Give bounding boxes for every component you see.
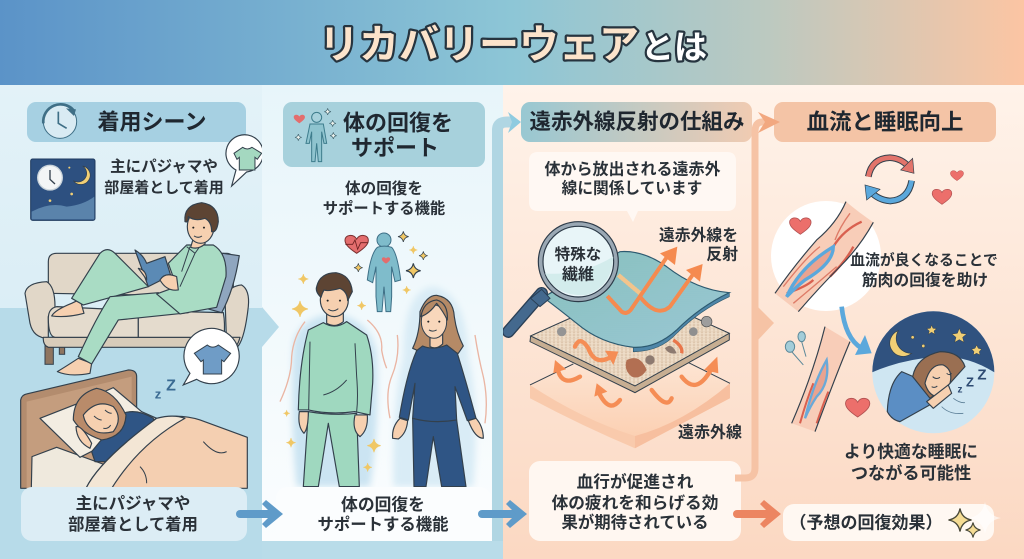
text: pajamas top: 主にパジャマや xyxy=(110,158,218,176)
text box: circulation: 体の疲れを和らげる効 xyxy=(552,494,718,512)
text box: expected recovery xyxy=(783,502,1001,541)
heading bar: body recovery xyxy=(283,102,485,167)
arrow: blue scene to body xyxy=(240,500,283,528)
heading bar: blood flow: 血流と睡眠向上 xyxy=(807,110,963,134)
label: reflect far infrared: 遠赤外線を xyxy=(659,226,738,244)
text box: circulation: 血行が促進され xyxy=(577,472,694,492)
icon: body and heart xyxy=(345,233,401,312)
title: リカバリーウェア xyxy=(319,23,639,67)
illustration: woman in bed xyxy=(21,370,247,488)
text: pajamas top: 部屋着として着用 xyxy=(104,178,224,196)
text box: pajamas bottom: 部屋着として着用 xyxy=(68,515,198,534)
label: special fiber: 繊維 xyxy=(562,264,594,284)
panel: wearing scenes xyxy=(0,85,263,559)
icon: cycle arrows xyxy=(865,158,914,201)
icon: sleeping z xyxy=(155,378,176,402)
label: reflect far infrared: 反射 xyxy=(706,246,738,264)
panel: blood flow and sleep xyxy=(758,85,1024,559)
heading bar: wearing scenes: 着用シーン xyxy=(98,110,206,134)
text box: pajamas bottom: 主にパジャマや xyxy=(76,494,190,513)
top teal fabric xyxy=(543,251,729,352)
arrow: orange connector top xyxy=(735,112,780,478)
label: reflect far infrared xyxy=(659,226,738,264)
text box: circulation xyxy=(529,461,741,541)
icon: sleeping z: z xyxy=(155,386,162,402)
orange waves xyxy=(558,341,712,406)
text box: circulation: 果が期待されている xyxy=(561,513,709,532)
heading bar: body recovery: サポート xyxy=(351,136,439,160)
text: body function top: 体の回復を xyxy=(345,178,423,198)
illustration: fabric layers xyxy=(508,222,730,448)
illustration: man on sofa xyxy=(25,203,249,375)
text: better sleep: つながる可能性 xyxy=(851,463,971,483)
text: muscle recovery: 筋肉の回復を助け xyxy=(862,270,988,290)
text box: body function bottom xyxy=(276,487,491,541)
illustration: blood vessel in muscle xyxy=(775,202,873,312)
reflected arrows xyxy=(607,255,695,313)
panel: body recovery xyxy=(262,85,503,559)
icon: white vessel backdrop xyxy=(771,201,881,311)
icons: hearts xyxy=(790,171,964,417)
heading bar: wearing scenes xyxy=(27,102,246,142)
mid fabric layer xyxy=(530,290,729,393)
title band xyxy=(0,0,1024,85)
panel: far-infrared mechanism xyxy=(503,85,758,559)
callout: emitted far infrared: 体から放出される遠赤外 xyxy=(544,160,721,178)
text: body function top xyxy=(323,178,445,218)
arrow: blue connector top xyxy=(498,112,521,541)
text: better sleep: より快適な睡眠に xyxy=(844,442,978,462)
icon: green shirt bubble xyxy=(226,135,263,186)
heading bar: body recovery: 体の回復を xyxy=(343,110,453,136)
callout: emitted far infrared xyxy=(529,152,736,222)
icon: sleeping z: Z xyxy=(166,378,176,394)
icon: sleep z: z xyxy=(958,384,962,396)
text: body function top: サポートする機能 xyxy=(323,200,445,218)
icon: sleep z xyxy=(958,366,987,396)
label: far infrared: 遠赤外線 xyxy=(678,422,742,442)
label: special fiber: 特殊な xyxy=(555,244,601,264)
text box: pajamas bottom xyxy=(21,487,247,541)
magnifier xyxy=(508,222,618,332)
title: とは xyxy=(641,28,707,66)
illustration: people recovering xyxy=(280,231,486,487)
heading bar: blood flow xyxy=(774,102,996,142)
text: muscle recovery: 血流が良くなることで xyxy=(850,251,998,269)
arrow: orange mechanism to effect xyxy=(737,500,781,528)
heading bar: mechanism xyxy=(521,102,752,142)
heading bar: mechanism: 遠赤外線反射の仕組み xyxy=(529,110,745,134)
callout: emitted far infrared: 線に関係しています xyxy=(562,178,702,198)
text box: body function bottom: サポートする機能 xyxy=(317,515,449,534)
text box: body function bottom: 体の回復を xyxy=(341,494,425,514)
text: muscle recovery xyxy=(850,251,998,290)
illustration: sleeping woman circle xyxy=(872,311,994,433)
icon: sleep z: Z xyxy=(977,366,987,384)
chevron: panel divider xyxy=(262,307,279,347)
illustration: leg vessel xyxy=(785,327,850,432)
text: better sleep xyxy=(844,442,978,483)
icon: night clock card xyxy=(31,159,95,220)
arrow: blue body to mechanism xyxy=(482,500,527,528)
text: pajamas top xyxy=(104,158,224,196)
icon: sleep z: Z xyxy=(966,374,974,390)
skin layer xyxy=(530,362,730,448)
label: special fiber xyxy=(555,244,601,284)
icon: blue shirt bubble xyxy=(183,328,239,385)
text box: expected recovery: （予想の回復効果） xyxy=(790,512,942,532)
arrow: blood flow to sleep xyxy=(842,307,872,355)
